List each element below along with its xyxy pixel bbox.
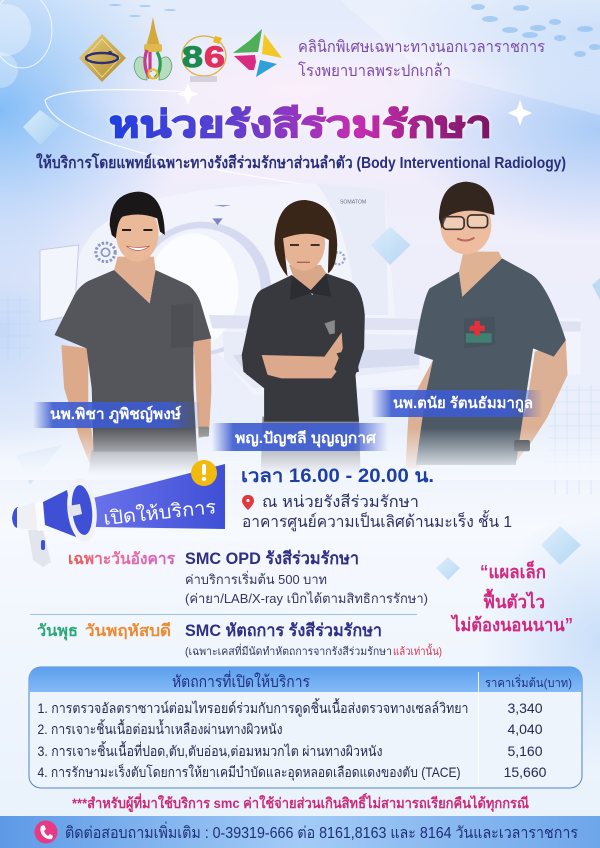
title: หน่วยรังสีร่วมรักษา bbox=[109, 104, 492, 145]
decorative diamond bbox=[541, 526, 581, 565]
row 2: 4,040 bbox=[507, 721, 543, 737]
location text: ณ หน่วยรังสีร่วมรักษา bbox=[262, 493, 419, 511]
time: เวลา 16.00 - 20.00 น. bbox=[241, 466, 434, 487]
Wednesday Thursday procedures block: แล้วเท่านั้น) bbox=[393, 643, 442, 658]
icon: warning badge bbox=[191, 460, 217, 486]
logo: four colour star bbox=[233, 29, 282, 77]
white fade under doctors bbox=[0, 428, 600, 480]
clinic heading: โรงพยาบาลพระปกเกล้า bbox=[298, 61, 451, 80]
icon: sparkle diamond bbox=[371, 227, 411, 265]
Tuesday OPD block: SMC OPD รังสีร่วมรักษา bbox=[185, 548, 359, 568]
disclaimer note: ***สำหรับผู้ที่มาใช้บริการ smc ค่าใช้จ่ายส่วนเกินสิทธิ์ไม่สามารถเรียกคืนได้ทุกกรณี bbox=[72, 792, 529, 812]
doctor: centre bbox=[242, 200, 365, 475]
megaphone open for service bbox=[12, 460, 225, 567]
location text bbox=[242, 493, 512, 532]
row 2: 2. การเจาะชิ้นเนื้อต่อมน้ำเหลืองผ่านทางผิวหนัง bbox=[38, 719, 282, 737]
logo: 86 years: 8 bbox=[182, 41, 203, 74]
Tuesday OPD block: เฉพาะวันอังคาร bbox=[68, 550, 175, 568]
icon: megaphone bbox=[12, 477, 100, 567]
icon: phone bbox=[34, 820, 58, 844]
icon: red cross bbox=[470, 321, 485, 336]
scanner model label: SOMATOM bbox=[340, 199, 366, 205]
row 1: 3,340 bbox=[507, 700, 543, 716]
location text: อาคารศูนย์ความเป็นเลิศด้านมะเร็ง ชั้น 1 bbox=[242, 510, 512, 532]
name tag: right doctor: นพ.ตนัย รัตนธัมมากูล bbox=[393, 395, 533, 413]
row 2 bbox=[38, 719, 543, 737]
row 3: 5,160 bbox=[507, 743, 543, 759]
Tuesday OPD block: (ค่ายา/LAB/X-ray เบิกได้ตามสิทธิการรักษา) bbox=[185, 591, 428, 606]
logo: 86 years: 6 bbox=[204, 41, 225, 74]
name tag: centre doctor bbox=[212, 423, 388, 451]
procedures table: ราคาเริ่มต้น(บาท) bbox=[485, 674, 572, 690]
Wednesday Thursday procedures block: (เฉพาะเคสที่มีนัดทำหัตถการจากรังสีร่วมรักษา bbox=[185, 643, 392, 658]
icon: location pin bbox=[242, 495, 254, 510]
Wednesday Thursday procedures block: วันพฤหัสบดี bbox=[85, 621, 171, 640]
clinic heading bbox=[298, 39, 545, 80]
name tag: left doctor bbox=[33, 402, 201, 428]
footer contact bar bbox=[0, 816, 600, 848]
name tag: centre doctor: พญ.ปัญชลี บุญญกาศ bbox=[235, 430, 376, 448]
logo: gold diamond award bbox=[79, 34, 126, 82]
procedures table: หัตถการที่เปิดให้บริการ bbox=[172, 670, 310, 691]
name tag: left doctor: นพ.พิชา ภูพิชญ์พงษ์ bbox=[50, 405, 181, 424]
logo: university crest bbox=[134, 17, 172, 80]
quote: “แผลเล็ก bbox=[480, 560, 546, 582]
Wednesday Thursday procedures block: วันพุธ bbox=[37, 622, 78, 641]
table body bbox=[29, 667, 582, 788]
quote bbox=[450, 560, 573, 635]
row 4: 15,660 bbox=[504, 764, 547, 780]
doctor: right bbox=[405, 182, 568, 468]
quote: ไม่ต้องนอนนาน” bbox=[450, 614, 573, 635]
logos row bbox=[79, 17, 282, 82]
banner text: เปิดให้บริการ bbox=[102, 496, 217, 530]
procedures table bbox=[29, 667, 582, 788]
CT scanner photo bbox=[40, 183, 581, 395]
name tag: right doctor bbox=[371, 390, 543, 417]
row 1: 1. การตรวจอัลตราซาวน์ต่อมไทรอยด์ร่วมกับการดูดชิ้นเนื้อส่งตรวจทางเซลล์วิทยา bbox=[38, 698, 468, 717]
doctor: left bbox=[54, 192, 211, 475]
quote: ฟื้นตัวไว bbox=[483, 588, 545, 612]
row 4: 4. การรักษามะเร็งตับโดยการให้ยาเคมีบำบัดและอุดหลอดเลือดแดงของตับ (TACE) bbox=[38, 763, 460, 781]
table header bbox=[29, 667, 582, 692]
clinic heading: คลินิกพิเศษเฉพาะทางนอกเวลาราชการ bbox=[298, 39, 545, 56]
row 3 bbox=[38, 741, 543, 759]
banner bbox=[93, 464, 225, 529]
Tuesday OPD block: ค่าบริการเริ่มต้น 500 บาท bbox=[185, 571, 327, 587]
logo: 86 years bbox=[182, 36, 226, 82]
Wednesday Thursday procedures block bbox=[37, 620, 442, 658]
row 3: 3. การเจาะชิ้นเนื้อที่ปอด,ตับ,ตับอ่อน,ต่อมหมวกไต ผ่านทางผิวหนัง bbox=[38, 741, 382, 759]
Wednesday Thursday procedures block: SMC หัตถการ รังสีร่วมรักษา bbox=[185, 620, 382, 640]
Tuesday OPD block bbox=[68, 548, 428, 606]
